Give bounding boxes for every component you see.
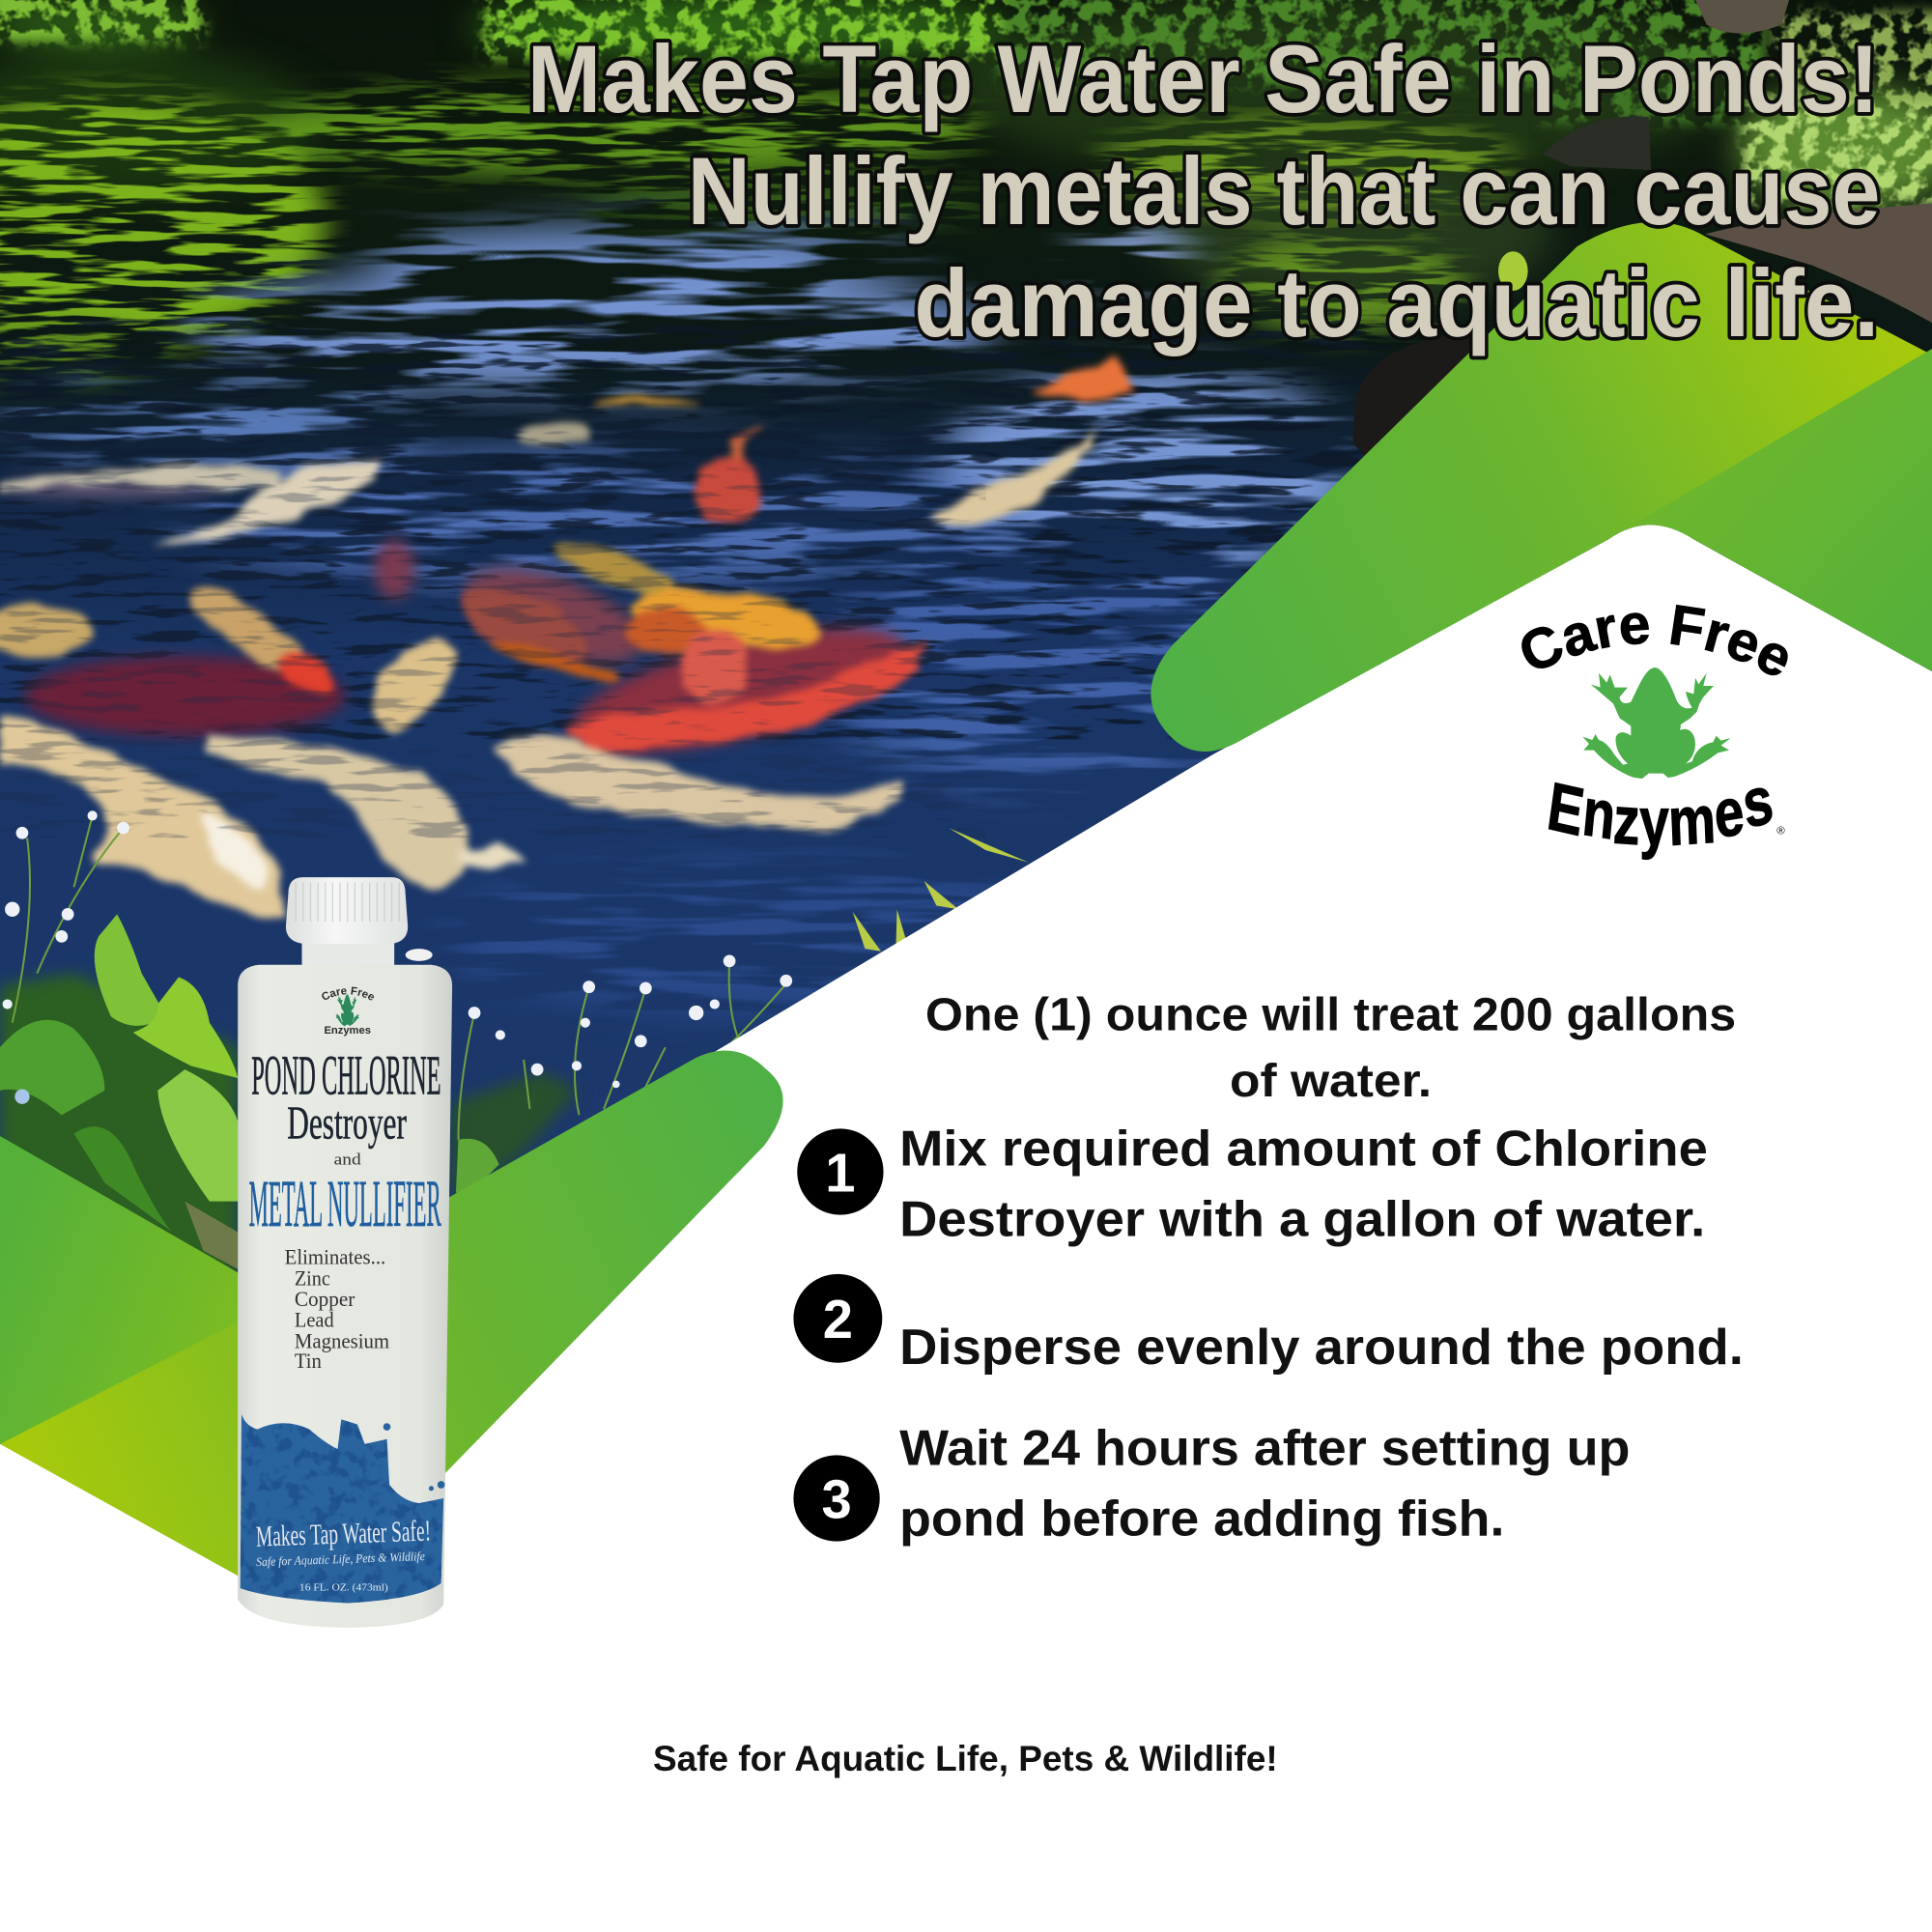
step 1: Mix required amount of Chlorine — [899, 1122, 1708, 1178]
flowers left — [3, 810, 129, 1104]
darker green triangle left — [0, 1136, 283, 1444]
mini logo — [322, 987, 374, 1037]
shore plants left — [0, 810, 238, 1282]
text: METAL NULLIFIER — [249, 1167, 441, 1240]
label text: Destroyer — [287, 1098, 407, 1150]
logo: Care Free Enzymes — [1521, 605, 1788, 861]
label text: Tin — [295, 1350, 322, 1373]
step 1 — [797, 1122, 1708, 1247]
instructions — [793, 988, 1744, 1547]
wordmark Enzymes: Enzymes — [1544, 762, 1777, 861]
title: damage to aquatic life. — [914, 250, 1879, 357]
label text: Safe for Aquatic Life, Pets & Wildlife — [256, 1549, 425, 1569]
step 1: 1 — [825, 1142, 856, 1203]
footer safety line: Safe for Aquatic Life, Pets & Wildlife! — [653, 1739, 1278, 1778]
logo: Care Free Enzymes: ® — [1776, 826, 1785, 838]
label text: Eliminates... — [285, 1246, 385, 1269]
blue water label — [241, 1414, 444, 1603]
top vegetation — [0, 0, 1932, 203]
bottle neck — [301, 936, 394, 966]
step 3: 3 — [821, 1468, 852, 1529]
ripples over fish — [0, 419, 985, 838]
logo: Care Free Enzymes: Care Free — [1521, 605, 1788, 676]
mini logo: Enzymes — [324, 1025, 371, 1037]
step 1: Destroyer with a gallon of water. — [899, 1191, 1705, 1247]
label text: 16 FL. OZ. (473ml) — [299, 1583, 388, 1594]
step 3 — [793, 1421, 1631, 1547]
dark ripples under fish — [0, 321, 1392, 739]
text: POND CHLORINE — [251, 1044, 441, 1107]
bottle cap — [286, 877, 408, 944]
shore plants right — [406, 828, 1029, 1198]
step 3: pond before adding fish. — [899, 1491, 1504, 1547]
label text: Makes Tap Water Safe! — [255, 1514, 432, 1553]
label text — [249, 1044, 441, 1594]
bottle body — [238, 965, 452, 1628]
darker green triangle — [1633, 349, 1932, 671]
step 2 — [793, 1274, 1744, 1376]
label text: Copper — [295, 1288, 355, 1311]
label text: and — [334, 1150, 362, 1168]
rocks — [1353, 0, 1932, 458]
dosage text — [925, 988, 1736, 1107]
blue sky reflections — [0, 223, 1355, 1010]
label text: Lead — [295, 1309, 334, 1332]
dosage text: One (1) ounce will treat 200 gallons — [925, 988, 1736, 1040]
title — [527, 26, 1880, 357]
koi fish — [0, 352, 1135, 919]
green ribbon lower left — [0, 1051, 783, 1577]
dosage text: of water. — [1230, 1055, 1432, 1107]
step 2: Disperse evenly around the pond. — [899, 1320, 1744, 1376]
white lower-right panel — [0, 525, 1932, 1932]
icon: frog — [1582, 668, 1731, 779]
green ribbon top right — [1151, 222, 1932, 752]
label text: Magnesium — [295, 1329, 389, 1352]
green reflections — [0, 82, 1516, 379]
product bottle — [238, 877, 452, 1628]
mini logo: Care Free — [322, 987, 374, 1001]
label text: Zinc — [295, 1266, 330, 1290]
step 3: Wait 24 hours after setting up — [899, 1421, 1631, 1477]
shaded far bank — [0, 0, 1932, 308]
step 2: 2 — [823, 1289, 853, 1350]
